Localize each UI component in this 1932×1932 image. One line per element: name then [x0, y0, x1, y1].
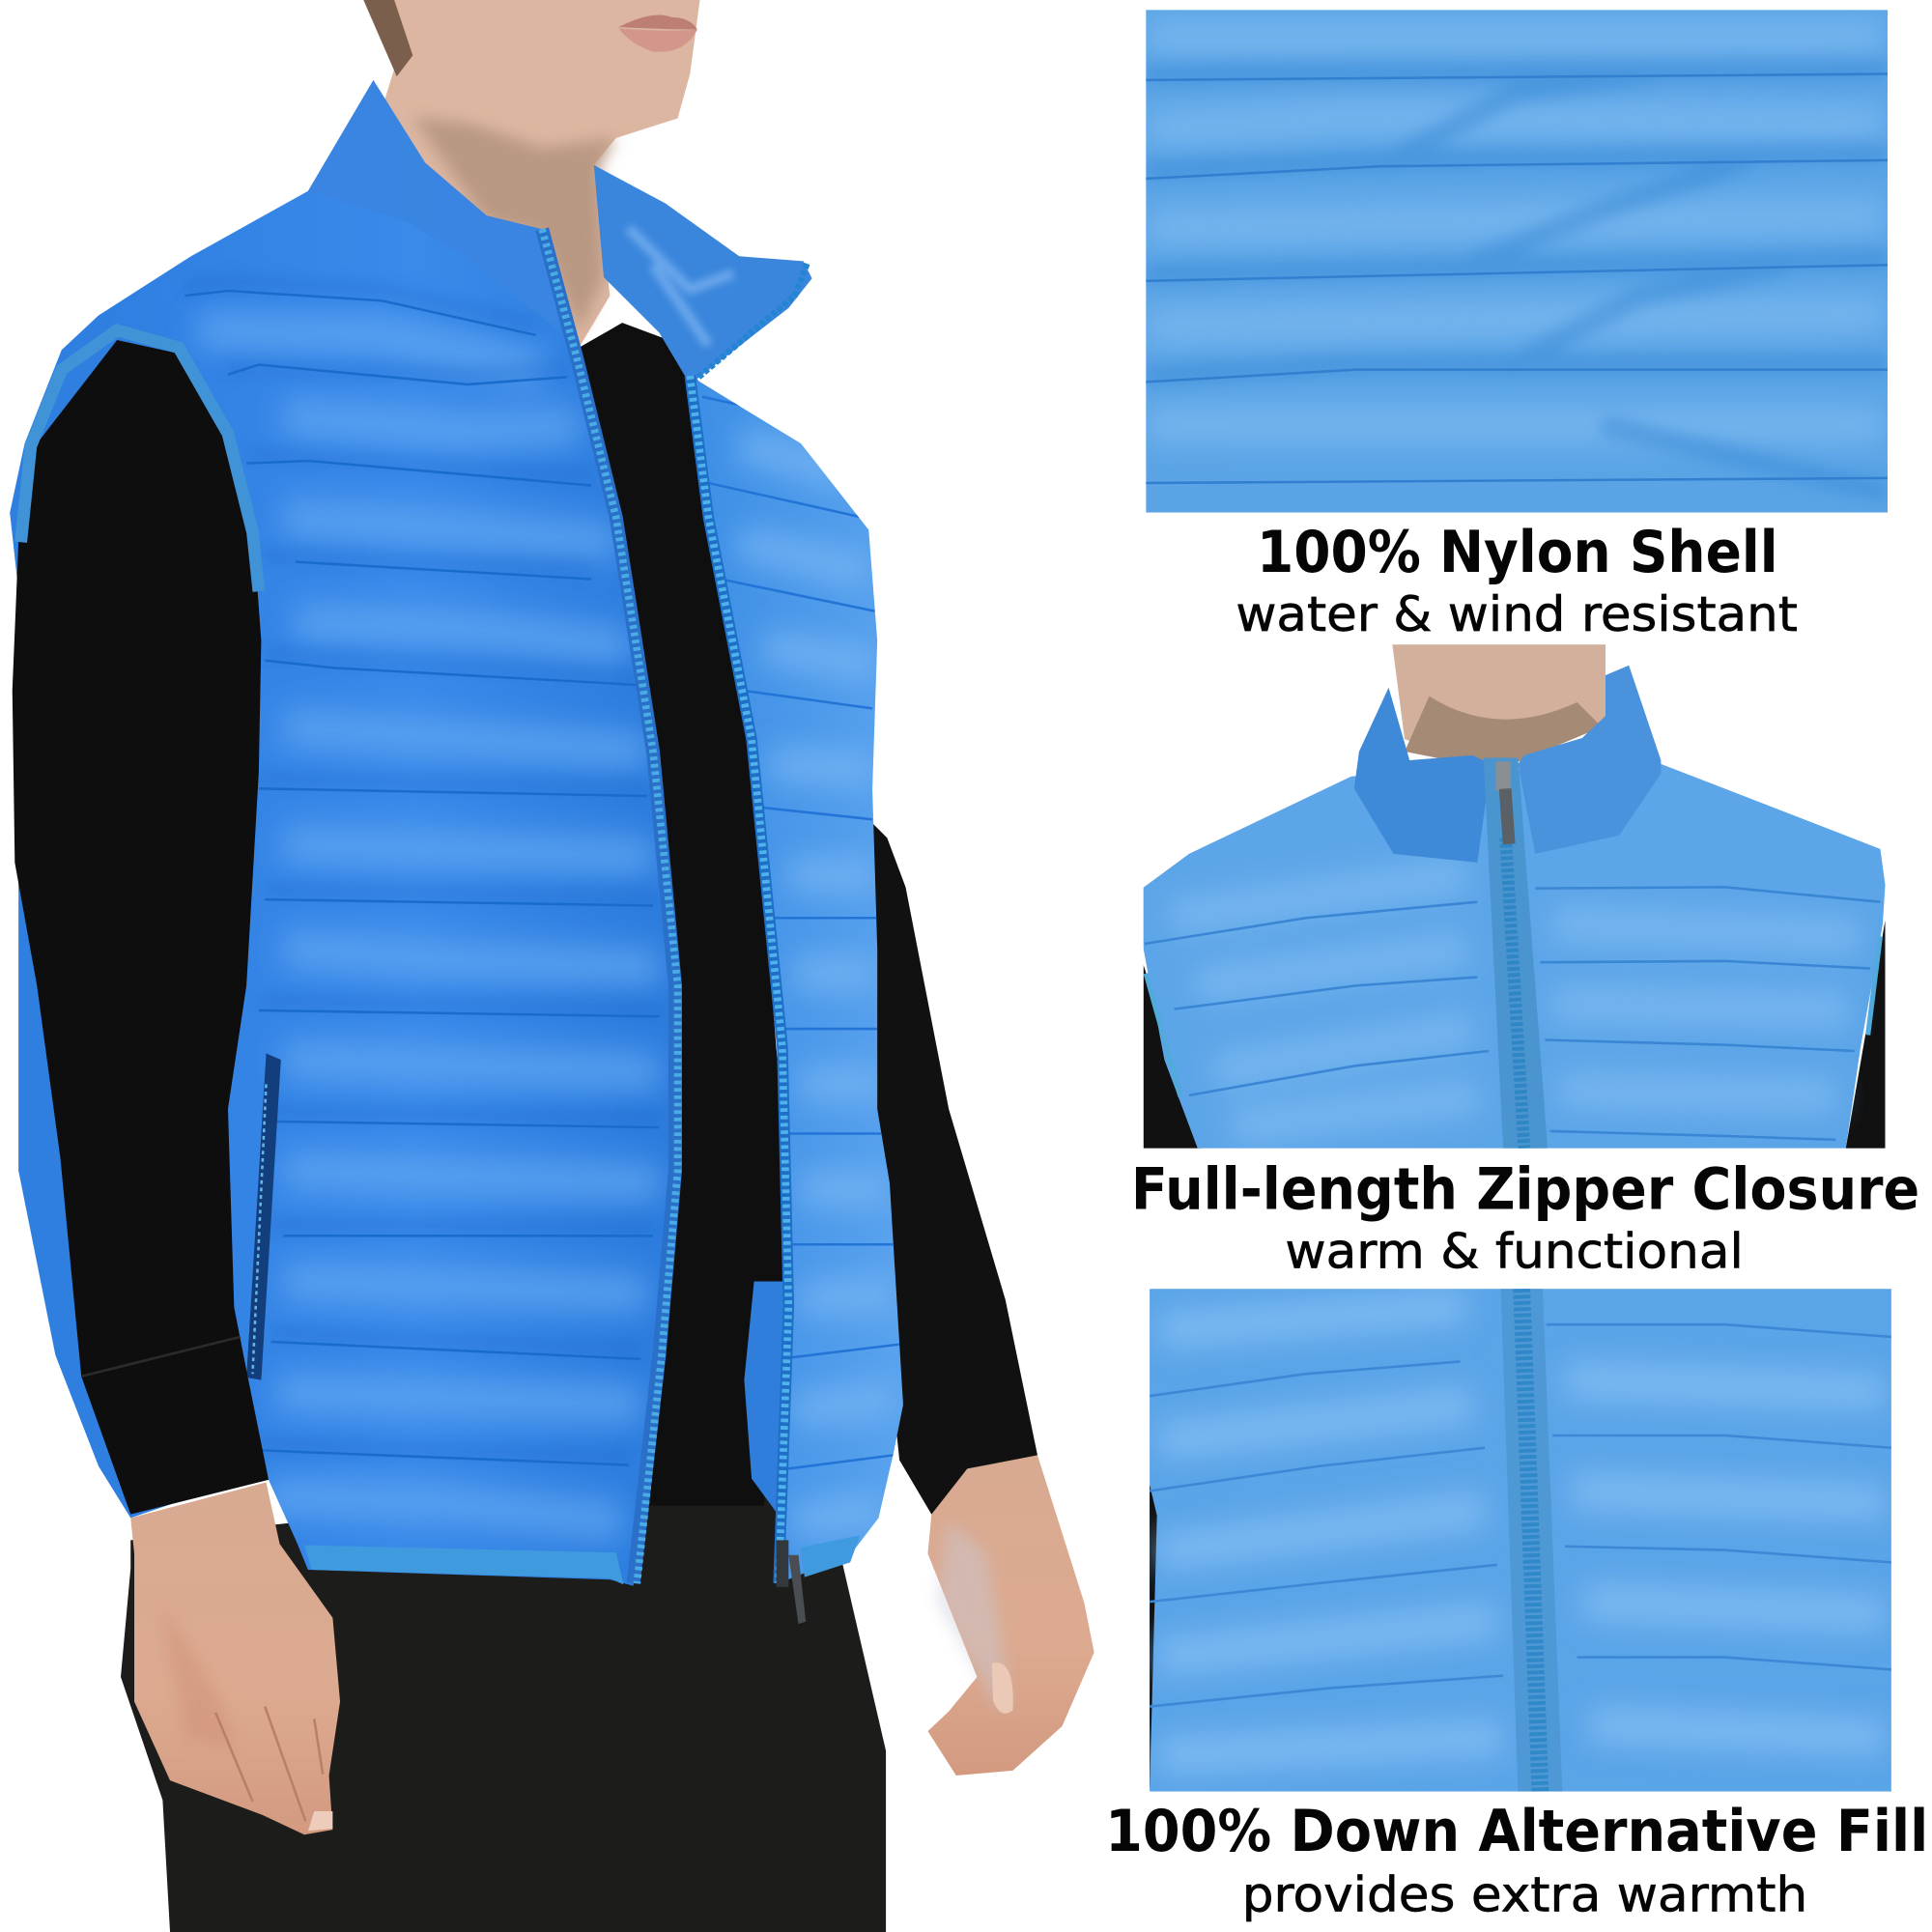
zipper teeth: [1506, 838, 1524, 1149]
left hand: [130, 1482, 340, 1834]
panel: model wearing blue puffer vest: [10, 0, 1094, 1932]
right hem binding: [801, 1535, 860, 1577]
head and neck: [363, 0, 699, 348]
hem binding: [304, 1545, 623, 1584]
panel: nylon shell close-up: [1146, 10, 1888, 513]
right zipper highlight: [690, 376, 788, 1583]
pocket zipper: [246, 1054, 281, 1380]
inner collar: [594, 165, 812, 384]
fabric folds: [1146, 69, 1888, 493]
right sleeve: [863, 813, 1037, 1515]
vest body: [1142, 764, 1886, 1149]
dark sleeve sliver: [1150, 1485, 1157, 1792]
fabric highlights: [1158, 1306, 1886, 1756]
black sleeve right: [1846, 921, 1886, 1149]
collar fold: [308, 80, 542, 238]
quilting seams: [185, 291, 659, 1465]
vest back panel: [10, 316, 259, 1518]
fabric base: [1150, 1289, 1891, 1792]
armhole binding: [21, 330, 259, 591]
zipper tape: [1484, 757, 1548, 1149]
left sleeve: [13, 340, 269, 1515]
black t-shirt: [573, 323, 791, 1506]
zipper pull: [777, 1540, 806, 1624]
quilting seams: [1145, 887, 1880, 1140]
subheading: zipper: warm & functional: [1285, 1223, 1744, 1279]
panel: down alternative fill close-up: [1150, 1289, 1891, 1792]
zipper tape: [1501, 1289, 1562, 1792]
vest highlights: [1171, 875, 1861, 1127]
right pocket shading: [744, 1282, 788, 1516]
quilting seams: [1146, 74, 1888, 483]
armhole bindings: [1146, 936, 1880, 1096]
quilting highlights: [197, 330, 659, 1521]
collar: [1354, 666, 1661, 863]
trousers: [121, 1485, 886, 1932]
panel: zipper close-up: [1142, 644, 1886, 1149]
black sleeve left: [1144, 965, 1202, 1149]
neck: [1392, 644, 1605, 770]
quilting seams: [1150, 1324, 1891, 1707]
vest right front: [690, 376, 903, 1583]
front zipper teeth: [542, 229, 678, 1583]
right zipper teeth: [690, 376, 788, 1583]
zipper pull: [1495, 761, 1516, 844]
heading: nylon shell: 100% Nylon Shell: [1257, 519, 1778, 586]
subheading: down fill: provides extra warmth: [1242, 1866, 1807, 1922]
fabric base: [1146, 10, 1888, 513]
quilting shadows: [301, 363, 549, 659]
front zipper: [542, 229, 675, 1583]
subheading: nylon shell: water & wind resistant: [1236, 586, 1798, 642]
vest left front: [99, 80, 675, 1586]
zipper teeth: [1521, 1289, 1540, 1792]
fabric highlights: [1146, 37, 1886, 425]
right hand: [927, 1455, 1094, 1776]
